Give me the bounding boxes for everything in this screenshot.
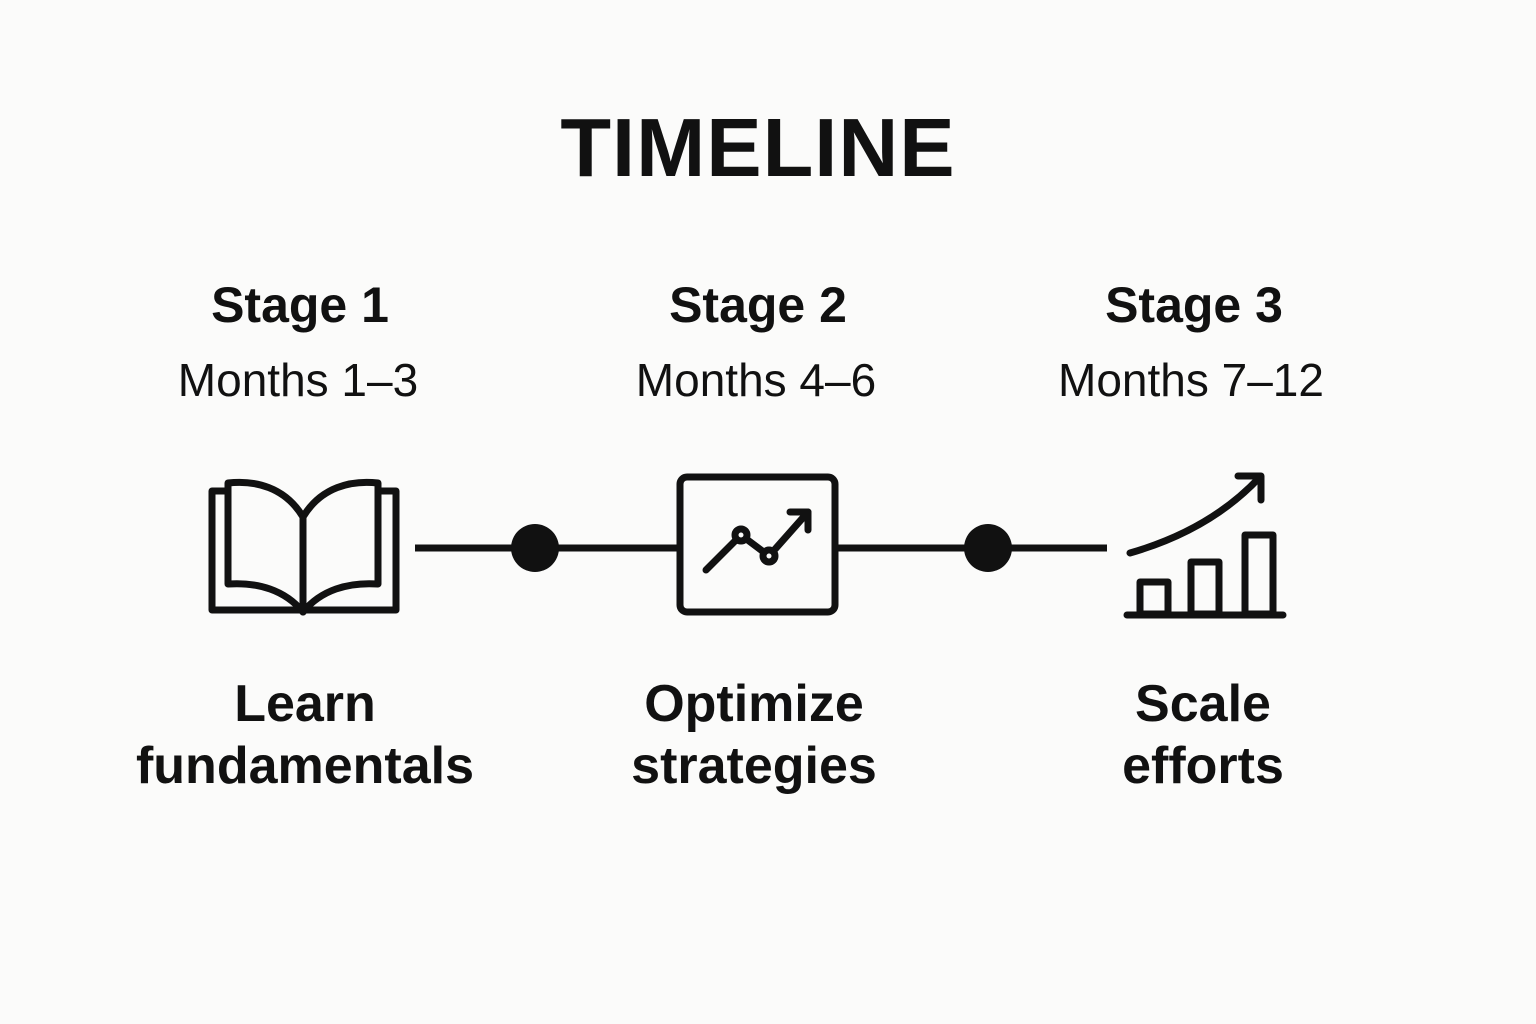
label stage 1: fundamentals [136,737,474,795]
label stage 1: Learn [234,675,376,733]
connector line with dots [415,524,1107,572]
stage 1 heading: Stage 1 [211,277,389,333]
label stage 3 [1122,675,1284,795]
icon: open book [212,482,396,612]
label stage 3: Scale [1135,675,1271,733]
stage 2 months: Months 4–6 [636,354,876,406]
icon: growth bars [1127,476,1283,615]
stage 2 heading: Stage 2 [669,277,847,333]
label stage 3: efforts [1122,737,1284,795]
label stage 2: strategies [631,737,877,795]
title: TIMELINE [560,101,956,194]
label stage 1 [136,675,474,795]
stage 3 heading: Stage 3 [1105,277,1283,333]
label stage 2 [631,675,877,795]
label stage 2: Optimize [644,675,864,733]
icon: chart box [680,477,835,612]
stage 3 months: Months 7–12 [1058,354,1324,406]
stage 1 months: Months 1–3 [178,354,418,406]
